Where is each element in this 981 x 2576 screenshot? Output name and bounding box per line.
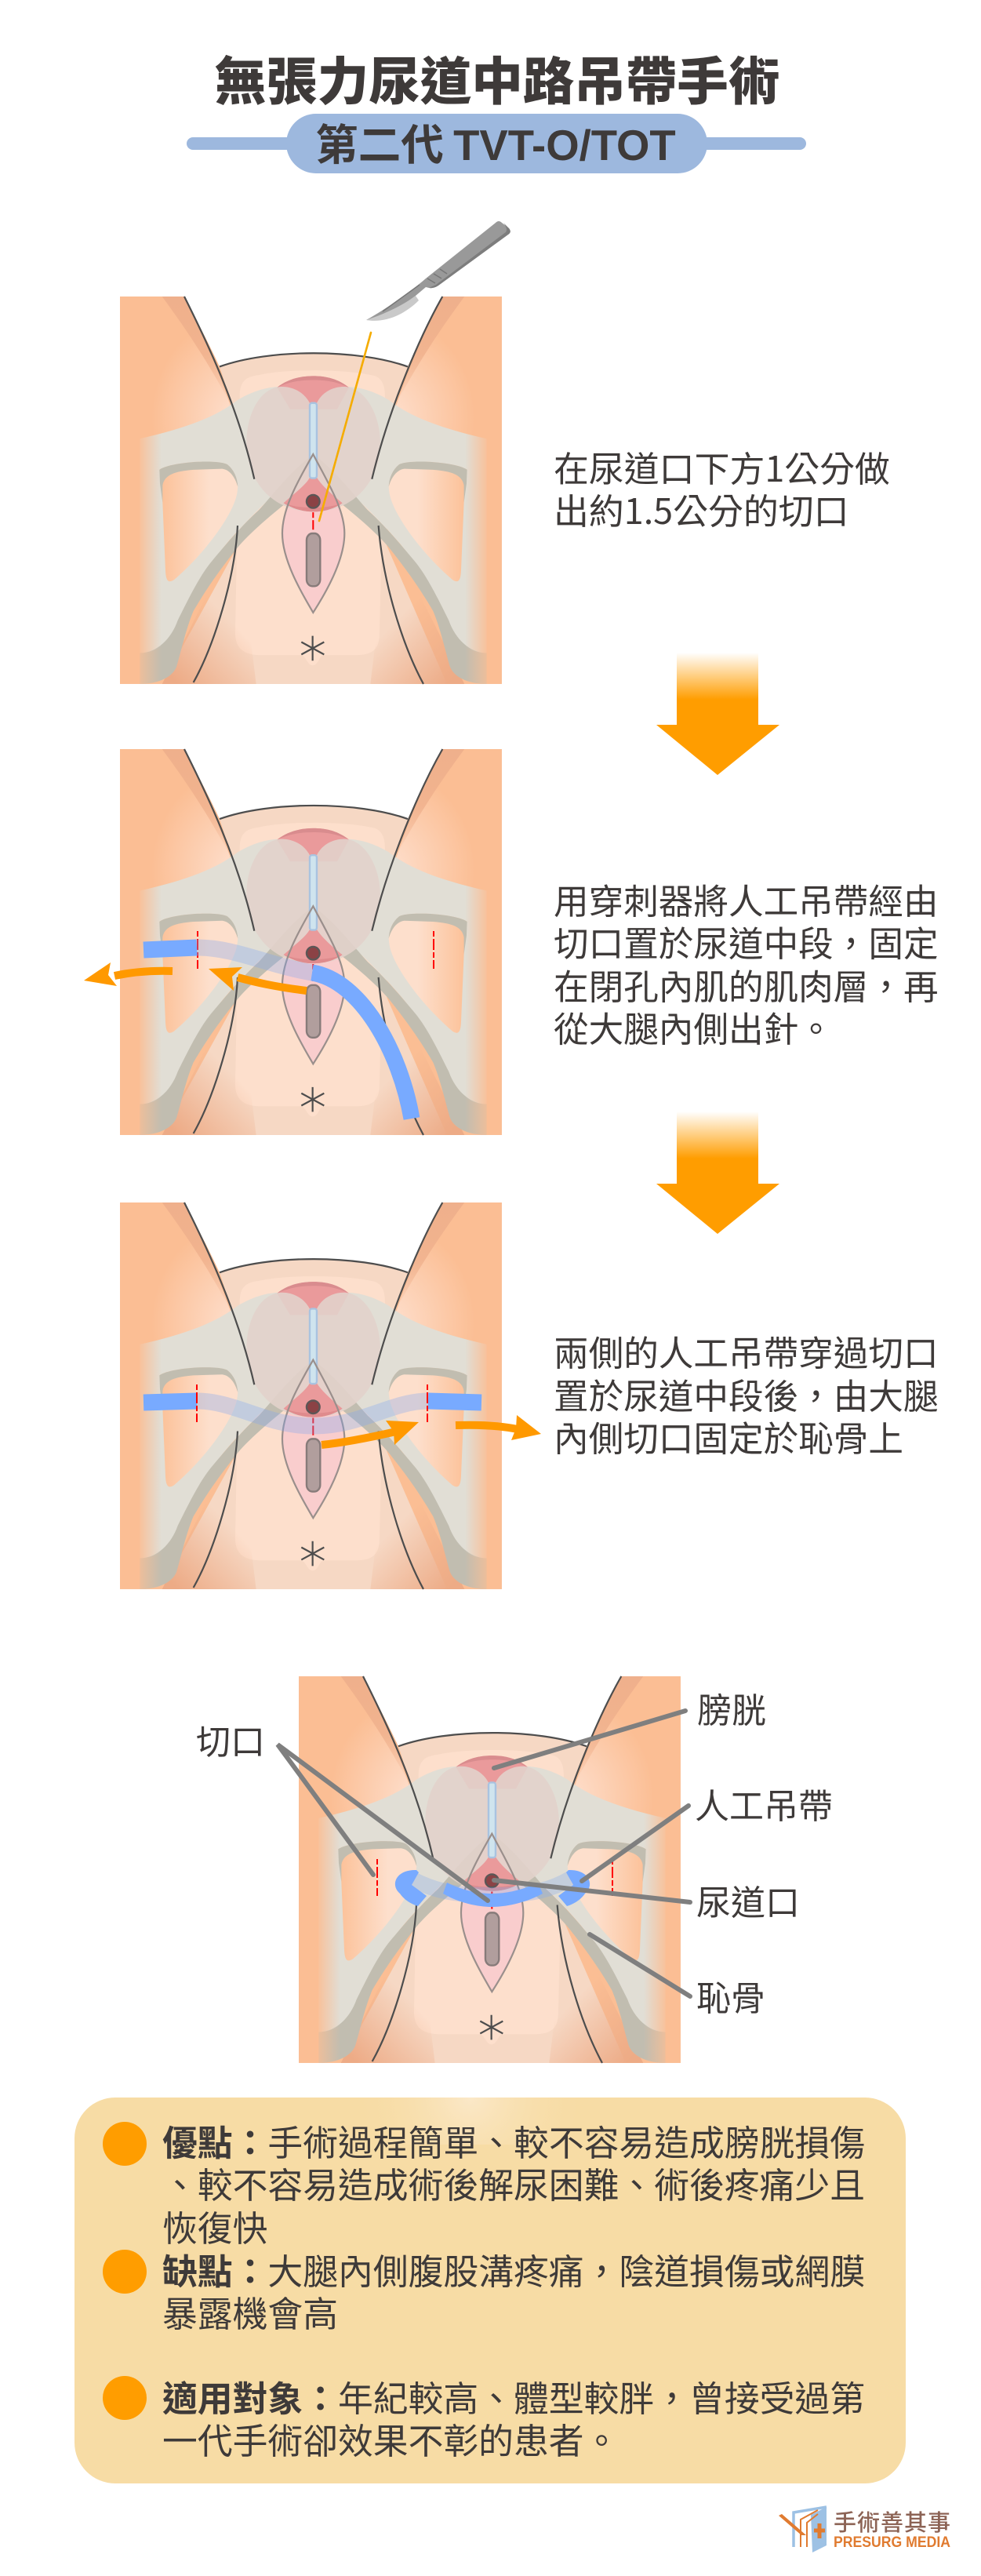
label: sling (582, 1778, 833, 1881)
step 2 text (554, 873, 939, 1052)
icon: scalpel (366, 221, 510, 321)
step 1 text (554, 441, 890, 534)
step 3 text: 置於尿道中段後，由大腿 (554, 1368, 939, 1419)
arrow: inner (209, 967, 307, 991)
sling (144, 1401, 481, 1426)
advantages: 恢復快 (162, 2200, 267, 2251)
advantages (103, 2115, 865, 2251)
label: sling: 人工吊帶 (695, 1778, 833, 1828)
pelvic anatomy (299, 1676, 685, 2063)
panel: labelled anatomy (196, 1676, 833, 2063)
incision guide line (319, 333, 371, 521)
label: urethral opening: 尿道口 (696, 1875, 800, 1925)
step 2 text: 切口置於尿道中段，固定 (554, 915, 939, 966)
label: bladder (494, 1683, 766, 1768)
panel: step 1 incision (120, 221, 510, 684)
incision marks (377, 1859, 612, 1896)
arrow: outer (456, 1415, 541, 1440)
pelvic anatomy (120, 1202, 507, 1589)
step 2 text: 用穿刺器將人工吊帶經由 (554, 873, 939, 924)
logo (779, 2505, 950, 2552)
subtitle banner (187, 111, 806, 173)
step 1 text: 出約1.5公分的切口 (554, 483, 849, 534)
icon: logo mark (779, 2507, 827, 2552)
panel: step 2 sling placement (84, 749, 507, 1135)
sling (144, 948, 412, 1119)
step 2 text: 在閉孔內肌的肌肉層，再 (554, 959, 939, 1010)
sling (395, 1870, 590, 1907)
arrow: inner (322, 1421, 419, 1445)
label: bladder: 膀胱 (697, 1683, 766, 1733)
disadvantages: 暴露機會高 (162, 2286, 338, 2337)
indications (103, 2370, 865, 2464)
logo: PRESURG MEDIA (834, 2534, 950, 2551)
pelvic anatomy (120, 749, 507, 1135)
pelvic anatomy (120, 297, 507, 684)
disadvantages: 缺點：大腿內側腹股溝疼痛，陰道損傷或網膜 (162, 2243, 865, 2294)
arrow: outer (84, 962, 173, 986)
panel: summary box (74, 2098, 906, 2483)
subtitle banner: 第二代 TVT-O/TOT (315, 111, 676, 173)
indications: 適用對象：年紀較高、體型較胖，曾接受過第 (162, 2370, 865, 2421)
logo text: 手術善其事 (834, 2505, 950, 2538)
incision marks (198, 931, 434, 969)
incision marks (197, 1384, 427, 1422)
title: 無張力尿道中路吊帶手術 (215, 40, 779, 115)
label: pubic bone: 恥骨 (696, 1970, 765, 2021)
step 3 text: 內側切口固定於恥骨上 (554, 1410, 903, 1461)
step 1 text: 在尿道口下方1公分做 (554, 441, 890, 492)
step 3 text: 兩側的人工吊帶穿過切口 (554, 1325, 939, 1376)
label: incision: 切口 (196, 1714, 265, 1764)
indications: 一代手術卻效果不彰的患者。 (162, 2413, 619, 2464)
panel: step 3 sling fixation (120, 1202, 541, 1589)
step 2 text: 從大腿內側出針。 (554, 1001, 834, 1052)
label: pubic bone (590, 1934, 765, 2021)
label: urethral opening (494, 1875, 800, 1925)
label: incision (196, 1714, 488, 1901)
disadvantages (103, 2243, 865, 2337)
arrow: step 1 to 2 (656, 653, 779, 775)
arrow: step 2 to 3 (656, 1112, 779, 1234)
advantages: 優點：手術過程簡單、較不容易造成膀胱損傷 (162, 2115, 865, 2166)
advantages: 、較不容易造成術後解尿困難、術後疼痛少且 (162, 2157, 865, 2208)
step 3 text (554, 1325, 939, 1461)
